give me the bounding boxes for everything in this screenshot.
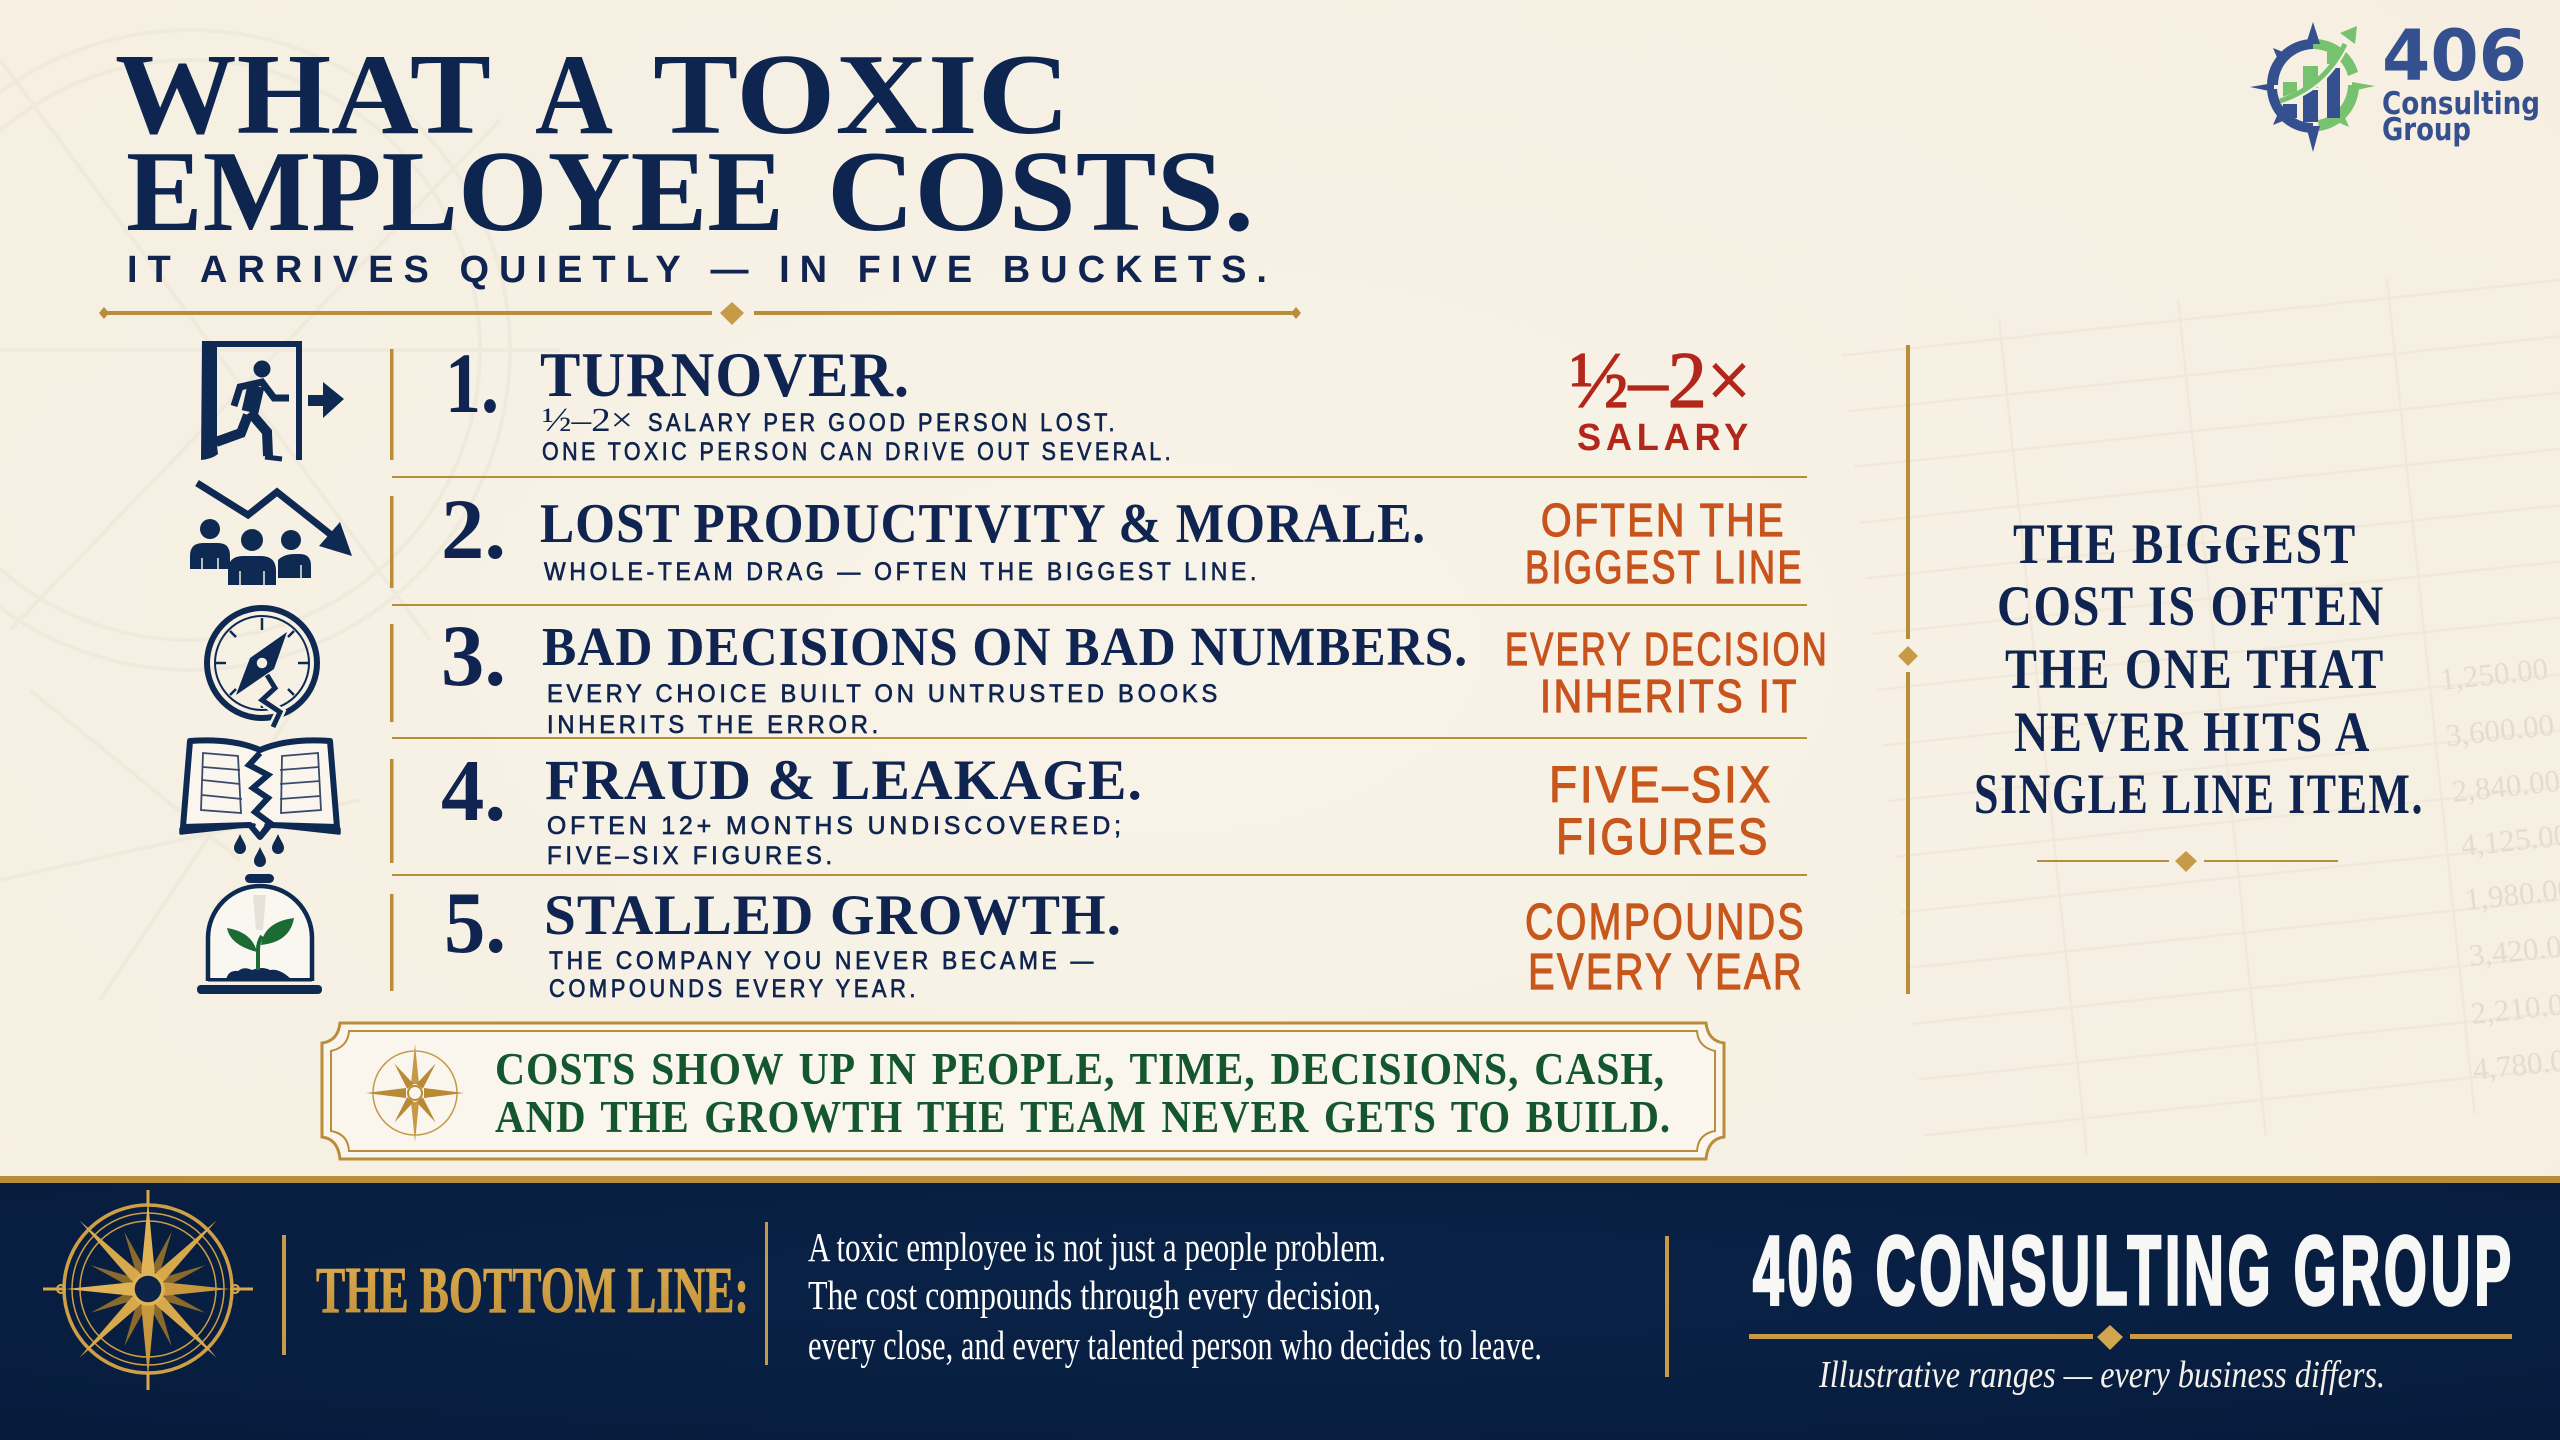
quote text: COST IS OFTEN: [1997, 575, 2385, 638]
row 5: stalled growth: COMPOUNDS EVERY YEAR.: [549, 975, 919, 1003]
row 4: fraud and leakage: FIGURES: [1556, 808, 1770, 865]
icon: cracked compass: [207, 608, 317, 727]
brand divider: [1749, 1325, 2512, 1350]
callout text: [495, 1043, 1671, 1142]
header divider: [99, 302, 1301, 325]
row 4: fraud and leakage: OFTEN 12+ MONTHS UNDISCOVERED;: [547, 812, 1125, 840]
quote rule with diamond: [1898, 345, 1918, 994]
callout: costs show up: [322, 1023, 1724, 1159]
quote text: THE ONE THAT: [2005, 638, 2385, 701]
quote text: SINGLE LINE ITEM.: [1974, 763, 2424, 826]
footer band: [0, 1176, 2560, 1440]
disclaimer: Illustrative ranges — every business differs.: [1818, 1354, 2385, 1396]
row 1: turnover: 1.: [445, 335, 499, 431]
row 2: lost productivity: [441, 481, 1804, 593]
quote text: NEVER HITS A: [2014, 701, 2371, 764]
background: faint ledger: [1840, 256, 2560, 1171]
row 3: bad decisions: EVERY DECISION: [1505, 623, 1829, 675]
row 5: stalled growth: [444, 875, 1806, 1003]
row 5: stalled growth: EVERY YEAR: [1528, 943, 1804, 1000]
title: TOXIC: [653, 31, 1070, 158]
row 5: stalled growth: COMPOUNDS: [1525, 893, 1806, 950]
logo wordmark: 406: [2382, 15, 2527, 97]
row dividers: [390, 349, 1807, 991]
row 1: turnover: ½–2×: [542, 402, 633, 439]
background: faint ledger: 3,600.00: [2444, 707, 2556, 753]
row 1: turnover: [445, 335, 1753, 466]
row 2: lost productivity: 2.: [441, 481, 506, 577]
row 1: turnover: ½–2×: [1570, 337, 1751, 425]
icon: torn ledger book leaking: [181, 740, 339, 867]
title: WHAT: [115, 31, 491, 158]
quote text: THE BIGGEST: [2013, 513, 2357, 576]
row 4: fraud and leakage: FIVE–SIX FIGURES.: [547, 842, 836, 870]
row 2: lost productivity: LOST PRODUCTIVITY & MORALE.: [540, 493, 1426, 555]
subtitle: IT ARRIVES QUIETLY — IN FIVE BUCKETS.: [127, 249, 1277, 291]
text: bottom line message: every close, and every talented person who decides to leave.: [808, 1322, 1542, 1368]
background: faint compass watermark: [0, 30, 560, 1000]
callout frame: [322, 1023, 1724, 1159]
row 4: fraud and leakage: FRAUD & LEAKAGE.: [545, 749, 1143, 812]
text: bottom line message: A toxic employee is not just a people problem.: [808, 1224, 1386, 1270]
text: bottom line message: The cost compounds through every decision,: [808, 1272, 1381, 1318]
row 3: bad decisions: EVERY CHOICE BUILT ON UNTRUSTED BOOKS: [547, 680, 1221, 708]
row 4: fraud and leakage: [441, 743, 1773, 870]
logo wordmark: Group: [2382, 112, 2471, 148]
icon: seedling under glass dome: [197, 874, 322, 994]
icon: gold compass rose: [43, 1190, 253, 1390]
row 1: turnover: SALARY: [1577, 417, 1753, 459]
quote text: [1974, 513, 2424, 826]
logo mark: compass with rising chart: [2250, 22, 2375, 152]
title: [115, 31, 1254, 255]
row 5: stalled growth: STALLED GROWTH.: [544, 884, 1122, 947]
row 1: turnover: TURNOVER.: [540, 340, 910, 410]
row 1: turnover: ONE TOXIC PERSON CAN DRIVE OUT SEVERAL.: [542, 438, 1174, 466]
logo wordmark: [2382, 15, 2540, 148]
icon: people under falling trend: [190, 483, 352, 585]
footer rules: [282, 1222, 1669, 1377]
text: bottom line message: [808, 1224, 1542, 1368]
callout text: AND THE GROWTH THE TEAM NEVER GETS TO BUILD.: [495, 1091, 1671, 1142]
title: A: [535, 31, 613, 158]
row 3: bad decisions: [441, 608, 1829, 739]
background: faint ledger: 1,250.00: [2438, 651, 2550, 697]
row 3: bad decisions: INHERITS IT: [1540, 670, 1799, 722]
row 3: bad decisions: 3.: [441, 608, 506, 705]
row 1: turnover: SALARY PER GOOD PERSON LOST.: [648, 409, 1118, 437]
logo: 406 Consulting Group: [2250, 15, 2540, 152]
title: EMPLOYEE: [126, 128, 784, 255]
heading: the bottom line: THE BOTTOM LINE:: [316, 1254, 749, 1327]
row 3: bad decisions: INHERITS THE ERROR.: [547, 711, 882, 739]
background: faint ledger: 2,840.00: [2450, 763, 2560, 809]
row 2: lost productivity: BIGGEST LINE: [1525, 541, 1804, 593]
panel: pull quote: [1898, 345, 2424, 994]
icon: person running out door: [201, 341, 344, 460]
title: COSTS.: [827, 128, 1254, 255]
row 4: fraud and leakage: 4.: [441, 743, 506, 840]
row 4: fraud and leakage: FIVE–SIX: [1549, 756, 1773, 813]
row 5: stalled growth: 5.: [444, 875, 506, 972]
row 5: stalled growth: THE COMPANY YOU NEVER BECAME —: [549, 947, 1097, 975]
callout text: COSTS SHOW UP IN PEOPLE, TIME, DECISIONS, CASH,: [495, 1043, 1665, 1094]
icon: compass rose small: [366, 1044, 464, 1142]
row 2: lost productivity: OFTEN THE: [1541, 494, 1786, 546]
row 3: bad decisions: BAD DECISIONS ON BAD NUMBERS.: [542, 616, 1468, 677]
row 2: lost productivity: WHOLE-TEAM DRAG — OFTEN THE BIGGEST LINE.: [544, 558, 1260, 586]
quote ornament: [2037, 851, 2338, 872]
